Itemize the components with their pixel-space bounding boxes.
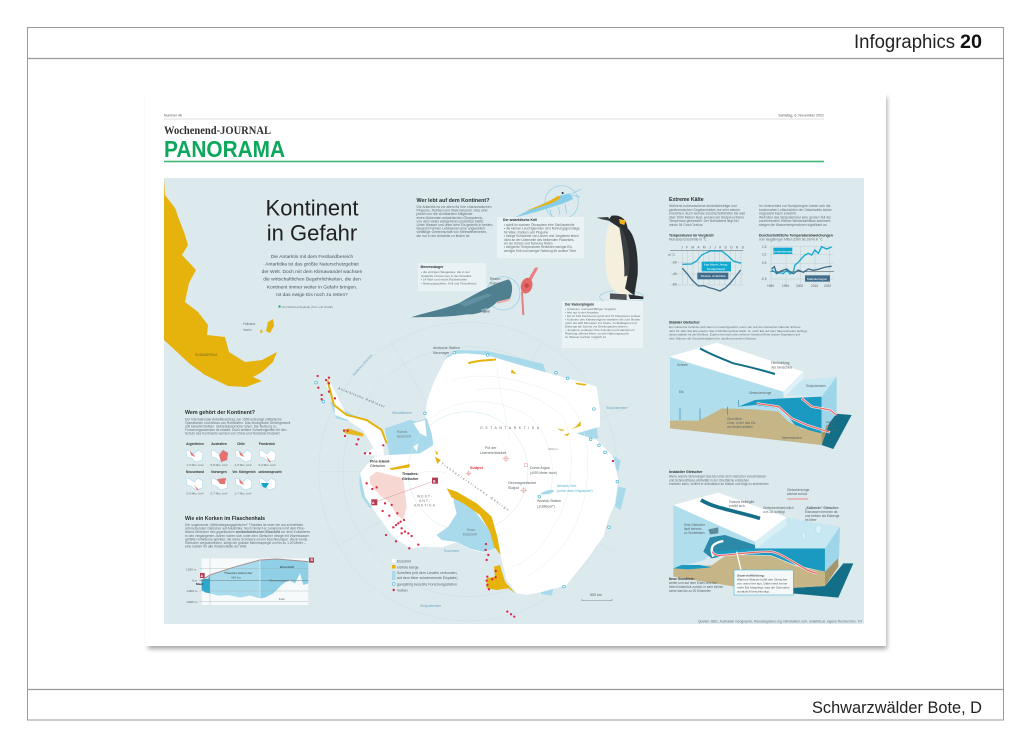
south america map: SÜDAMERIKA: [195, 353, 218, 357]
stable glacier diagram: am Boden aufsitzt: [727, 425, 753, 429]
antarctic peninsula: [326, 383, 387, 456]
section: who owns the continent: Norwegen: [211, 470, 227, 474]
section: who owns the continent: Argentinien: [186, 442, 204, 446]
map labels: Südpolarmeer: [420, 604, 442, 608]
krill box: • spielt im marinen Ökosystem eine Schlüsselrolle: [504, 223, 575, 227]
chart: thwaites glacier cross section: Thwaites-Gletscher: [224, 571, 253, 575]
section: who owns the continent: Forschungszwecken ist erlaubt. Doch weitere Schwierigkeiten für den: [185, 428, 287, 432]
unstable glacier diagram: Sauerstoffbildung:: [737, 574, 764, 578]
stable glacier diagram: Grundlinie:: [727, 417, 743, 421]
unstable glacier diagram: fixiert hinterrück zurück, in sehr kleiner: [669, 585, 724, 589]
section: who owns the continent: Wem gehört der Kontinent?: [185, 410, 255, 416]
stable glacier diagram: Zone, in der das Eis: [727, 421, 756, 425]
header label: 20: [960, 32, 982, 53]
chart: thwaites glacier cross section: -2000 m: [186, 600, 198, 604]
penguin box: • Kolonien des Kaiserpinguins wandern bis zum Brüten: [565, 318, 640, 322]
map legend: eisfreie Berge: [397, 566, 419, 570]
ross ice shelf: [437, 497, 495, 552]
section: cork in a bottleneck: Island-Gletscher den gigantischen westantarktischen Eisschild vor dem Kollabieren.: [185, 530, 311, 534]
stable glacier diagram: Tiefen-: [826, 424, 835, 428]
whale and squid labels: Riesen-: [490, 277, 501, 281]
map labels: Neumayer: [433, 351, 450, 355]
penguin box: mehr als 200 Kilometer zur Küste, zu Eisklippen und: [565, 321, 637, 325]
penguin box: Eisbergs als Schutz vor Seeleoparden dienen: [565, 324, 628, 328]
section: extreme cold: minus 94 Grad Celsius.: [669, 223, 703, 227]
chart: temperature anomalies: 0,5: [762, 261, 767, 265]
chart: temperature comparison: Kap Morris Jesup,: [704, 262, 728, 266]
whale box: • 14 Wal- und sechs Robbenarten: [421, 278, 467, 282]
unstable glacier diagram: Neue Grundlinie:: [669, 577, 695, 581]
intro text: die wirtschaftlichen Begehrlichkeiten, die den: [263, 276, 361, 282]
unstable glacier diagram: von unten her aus. Dabei wird immer: [737, 582, 788, 586]
intro text: [262, 254, 363, 298]
unstable glacier diagram: [669, 488, 853, 598]
section: cork in a bottleneck: Der sogenannte „Weltuntergangsgletscher" Thwaites ist einer der am schnellsten: [185, 523, 303, 527]
ice shelves: [330, 350, 626, 596]
chart: temperature comparison: -60: [672, 282, 677, 286]
header label: Infographics: [854, 32, 955, 53]
emperor penguin: [597, 215, 644, 304]
chart: thwaites glacier cross section: -1000 m: [186, 589, 198, 593]
masthead: Wochenend-JOURNAL: [164, 125, 271, 137]
map labels: 500 km: [590, 593, 602, 597]
map labels: (unter dem Eispanzer): [557, 489, 593, 493]
chart: thwaites glacier cross section: 460 km: [231, 576, 242, 580]
map labels: Wostok-Station: [537, 499, 561, 503]
mini maps: territorial claims: [186, 450, 276, 490]
title: Kontinent: [266, 196, 358, 220]
map labels: Unerreichbarkeit: [480, 451, 506, 455]
west antarctic thwaites zone: [370, 472, 407, 520]
unstable glacier diagram: „Kalbende" Gletscher:: [805, 506, 839, 510]
section: extreme cold: erreichten. Auch weil die Durchschnittshöhe bei weit: [669, 212, 745, 216]
antarctica map: [315, 322, 630, 621]
map labels: („Kältepol"): [537, 504, 555, 508]
masthead: Nummer 46: [164, 114, 182, 118]
section: cork in a bottleneck: [185, 516, 311, 549]
intro text: Kontinent immer weiter in Gefahr bringen.: [267, 284, 357, 290]
intro text: der Welt. Doch mit dem Klimawandel wachsen: [262, 269, 363, 275]
penguin box: [562, 301, 643, 348]
chart: thwaites glacier cross section: [186, 558, 314, 605]
pole markers: [466, 455, 527, 494]
section: who owns the continent: Frankreich: [259, 442, 275, 446]
section: extreme cold: Im Unterschied zur Nordpolregion haben sich die: [759, 204, 831, 208]
krill box: [497, 217, 584, 258]
whale box: • Nahrungsquellen: Krill und Tintenfische: [421, 281, 477, 285]
section: extreme cold: zunehmenden Wärme Westantarktikas aufnimmt,: [759, 219, 831, 223]
section: who owns the continent: 1,2 Mio. km²: [234, 463, 252, 467]
map labels: OSTANTARKTIKA: [480, 426, 542, 430]
masthead: [164, 114, 824, 162]
stable glacier diagram: warme: [826, 420, 835, 424]
infographic panel background: [164, 178, 864, 624]
weddell white islands: [413, 420, 427, 452]
chart: temperature comparison: Wostok, Antarktika: [701, 274, 726, 278]
stable glacier text: desto stabiler ist der Eisfluss. Zudem bremsen die mehrere Hundert Meter dicken Eisplatten auf: [669, 333, 800, 337]
chart: temperature comparison: -20: [672, 260, 677, 264]
unstable glacier text: ersetzen kann, verliert er dramatisch an Masse und trägt zu zerbrechen.: [669, 482, 769, 486]
section: who lives on the continent: Unter Wasser und unter dem Eis gedeiht in beiden,: [416, 223, 493, 227]
map labels: Ross-: [467, 528, 476, 532]
map labels: [338, 346, 628, 608]
title: in Gefahr: [267, 220, 357, 246]
section: who lives on the continent: von dem vieles weitgehend unsichtbar bleibt.: [416, 219, 484, 223]
section: who owns the continent: 6,9 Mio. km²: [210, 463, 228, 467]
map labels: ANT-: [419, 499, 431, 503]
stable glacier diagram: Meeresboden: [782, 436, 802, 440]
chart: temperature anomalies: 2010: [811, 284, 818, 288]
chart: temperature comparison: -40: [672, 272, 677, 276]
section: who owns the continent: Schutz des Kontinents werden von China und Russland blockiert.: [185, 432, 281, 436]
stable glacier diagram: Eis: [679, 390, 684, 394]
krill box: für Wale, Robben und Pinguine: [504, 230, 548, 234]
unstable glacier diagram: mehr Eis freigelegt, was die Schmelze: [737, 586, 790, 590]
map labels: Transantarktisches Gebirge: [440, 462, 511, 513]
section: who owns the continent: 2,7 Mio. km²: [210, 492, 228, 496]
map legend: Vulkan: [397, 588, 408, 592]
map labels: deutsche Station: [433, 346, 460, 350]
whale box: [418, 263, 486, 291]
chart: thwaites glacier cross section: B: [310, 558, 314, 562]
krill illustration: [515, 186, 582, 219]
map legend: [392, 559, 458, 592]
map labels: Ronne-: [397, 430, 408, 434]
unstable glacier text: Wenn warme Strömungen das Eis unter dem Gletscher verschmelzen: [669, 474, 766, 478]
section: who lives on the continent: die nur in der Antarktis zu finden ist.: [416, 234, 470, 238]
section: who lives on the continent: tausend Formen Lebewesen eine unglaublich: [416, 227, 485, 231]
section: extreme cold: Weit über das Südpolarmeer eine großen Teil der: [759, 215, 832, 219]
unstable glacier diagram: Warmes Wasser höhlt den Gletscher: [737, 578, 787, 582]
chart: thwaites glacier cross section: Fels: [279, 597, 285, 601]
stable glacier diagram: des Gletschers: [771, 366, 793, 370]
unstable glacier diagram: Gletschereisbrüchlich: [763, 506, 794, 510]
section: extreme cold: geothermischen Gegebenheiten nur sehr extrem: [669, 208, 740, 212]
title: [266, 196, 358, 246]
section: extreme cold: steigen die Wassertemperaturen signifikant an.: [759, 223, 828, 227]
section: who owns the continent: Ver. Königreich: [232, 470, 256, 474]
unstable glacier diagram: läuft beheim: [684, 527, 702, 531]
unstable glacier text: und Schmelzflüsse (Aktivität) in der Oberfläche entstehen: [669, 478, 749, 482]
map labels: Südpol: [470, 466, 483, 470]
map labels: Thwaites-: [402, 472, 419, 476]
whale box: Antarktis vorkommen in der Antarktis: [421, 274, 472, 278]
section: cork in a bottleneck: gefüllte Hohlräume gebildet, die diese Schmelze enorm beschleunigen. Wenn beide: [185, 537, 308, 541]
section: extreme cold: über 2000 Metern liegt, wurden am Südpol extreme: [669, 215, 744, 219]
contour lines: [390, 367, 588, 577]
section: who lives on the continent: eines blühenden antarktischen Ökosystems,: [416, 216, 483, 220]
stable glacier diagram: Fließrichtung: [771, 361, 790, 365]
map labels: Südliches Eismeer: [352, 352, 374, 377]
intro text: Ist das ewige Eis noch zu retten?: [276, 292, 348, 298]
penguin box: Richtung offenes Meer, wo die Nahrungssuche: [565, 332, 629, 336]
chart: temperature comparison: Monatsdurchschnitte in °C: [669, 238, 707, 242]
krill box: weniger Krill und weniger Nahrung für andere Tiere: [504, 249, 576, 253]
map labels: Weddellmeer: [392, 411, 413, 415]
chart: thwaites glacier cross section: Meer: [196, 582, 204, 586]
chart: temperature anomalies: 1980: [767, 284, 774, 288]
section: who lives on the continent: Die Antarktis ist vor allem für ihre charismatischen: [416, 205, 492, 209]
newspaper page: [145, 93, 886, 646]
map labels: Pol der: [485, 446, 497, 450]
section: who owns the continent: 1,3 Mio. km²: [186, 463, 204, 467]
unstable glacier diagram: wächst zurück: [787, 492, 808, 496]
penguin box: • Jungtiere verlassen ihre Kolonien und wandern in: [565, 328, 635, 332]
lake vostok: [540, 490, 554, 494]
A-B section line: [374, 481, 435, 502]
penguin box: • scheinen- und auchfähiger Vogelart: [565, 307, 616, 311]
chart: temperature comparison: [668, 234, 747, 291]
chart: temperature anomalies: [759, 234, 834, 288]
section: who owns the continent: Der Internationale Antarktisvertrag von 1959 untersagt militärische: [185, 418, 282, 422]
masthead: Samstag, 6. November 2021: [778, 114, 824, 118]
chart: temperature anomalies: -0,5: [761, 277, 767, 281]
section: who owns the continent: 0,5 Mio. km²: [186, 492, 204, 496]
stable glacier text: Jahr für Jahr das Eis ersetzt, das in Richtung Meer fließt. Je mehr Eis auf dem Meeresboden aufliegt,: [669, 329, 808, 333]
chart: temperature anomalies: 1,0: [762, 252, 767, 256]
stable glacier text: Stabiler Gletscher: [669, 320, 700, 324]
volcanoes: [316, 375, 614, 618]
map labels: Dome Argus: [530, 466, 550, 470]
unstable glacier diagram: zu Schelfeisen: [684, 531, 705, 535]
map labels: Südpolarmeer: [606, 406, 628, 410]
map labels: Gletscher: [370, 464, 386, 468]
stable glacier diagram: [670, 343, 852, 449]
section: who lives on the continent: vielfältige Gemeinschaft von Kleinstlebewesen,: [416, 230, 487, 234]
map labels: Südpol: [508, 486, 519, 490]
footer label: Schwarzwälder Bote, D: [812, 698, 982, 717]
byline: Von Manfred Zapletal (Text und Grafik): [282, 305, 333, 309]
sperm whale and squid: [411, 268, 538, 317]
south america map: [164, 178, 277, 387]
chart: thwaites glacier cross section: 1200 m: [186, 568, 197, 572]
stable glacier diagram: strömung: [826, 428, 839, 432]
section: who owns the continent: Operationen und Abbau von Rohstoffen. Das ökologische Gleichgewicht: [185, 421, 290, 425]
section: cork in a bottleneck: eine Gefahr für alle Küstenstädte der Welt.: [185, 545, 247, 549]
section: extreme cold: insgesamt kaum erwärmt.: [759, 212, 797, 216]
stable glacier diagram: Schnee: [677, 363, 688, 367]
map labels: (4093 Meter hoch): [530, 471, 557, 475]
chart: temperature anomalies: 1990: [782, 284, 789, 288]
chart: thwaites glacier cross section: 0 m: [192, 578, 198, 582]
stable glacier text: [669, 320, 808, 340]
stable glacier diagram: Gletscherzunge: [749, 391, 772, 395]
map labels: Wostok-See: [557, 484, 577, 488]
map legend: Schelfeis (mit dem Landeis verbunden,: [397, 571, 458, 575]
chart: temperature anomalies: 2020: [824, 284, 831, 288]
unstable glacier text: [669, 470, 769, 486]
map legend: Eisschild: [397, 560, 411, 564]
whale and squid labels: Kalmar: [490, 282, 501, 286]
section: who owns the continent: unbeansprucht: [258, 470, 282, 474]
masthead: PANORAMA: [164, 136, 285, 162]
south america map: Falkland-: [243, 322, 256, 326]
krill box: dicht an der Unterseite des treibenden Packeises,: [504, 238, 574, 242]
sources: Quellen: BBC, Australian Geographic, Reuseleglobus.org, klimafakten.com, antarktis.at, eigene Recherchen, 7/4: [698, 620, 862, 624]
research stations: [315, 351, 619, 588]
unstable glacier diagram: Eine Gletscher: [684, 523, 706, 527]
unstable glacier diagram: Eismassen brechen ab: [805, 510, 838, 514]
stable glacier diagram: Südpolarmeer: [806, 384, 827, 388]
map labels: 4000 m: [548, 447, 559, 451]
mountain ranges: [343, 369, 587, 593]
map legend: ganzjährig besetzte Forschungsstation: [397, 582, 457, 586]
unstable glacier diagram: und treiben als Eisberge: [805, 514, 840, 518]
chart: temperature comparison: Temperaturen im Vergleich: [669, 234, 714, 238]
unstable glacier diagram: Packeis treibt/gibt: [729, 500, 754, 504]
krill box: • steigende Temperaturen bedeuten weniger Eis,: [504, 245, 573, 249]
antarctic ice sheet: [360, 353, 618, 595]
unstable glacier diagram: seine das bis zu 20 Kilometer.: [669, 589, 712, 593]
section: who owns the continent: Neuseeland: [186, 470, 204, 474]
penguin box: • bis zu 130 Zentimeter groß und 37 Kilogramm schwer: [565, 314, 641, 318]
antarctica map: A: [372, 501, 375, 505]
krill box: • riesige Schwärme von Larven und Jungtieren leben: [504, 234, 579, 238]
krill box: Der antarktische Krill: [503, 218, 537, 222]
penguin box: im Wasser leichter möglich ist: [565, 335, 606, 339]
map labels: WEST-: [417, 494, 433, 498]
section: cork in a bottleneck: schmelzenden Gletscher auf Antarktika. Noch hindert er zusammen mit dem Pine-: [185, 527, 305, 531]
unstable glacier diagram: im Meer: [805, 518, 817, 522]
section: extreme cold: Während unbewaschene Antarktisbeträge und: [669, 204, 737, 208]
unstable glacier diagram: erhöht sich: [729, 504, 745, 508]
chart: temperature anomalies: vom langjährigen Mittel (1990 bis 2004) in °C: [759, 238, 823, 242]
chart: temperature anomalies: Südpolarregion: [807, 277, 828, 281]
unstable glacier diagram: weiter und auf dem Eises brechen: [669, 581, 717, 585]
chart: temperature anomalies: Durchschnittliche Temperaturabweichungen: [759, 234, 833, 238]
map graticule: [319, 322, 630, 621]
chart: temperature comparison: Nordgrönland: [707, 267, 725, 271]
section: who owns the continent: 0,4 Mio. km²: [258, 463, 276, 467]
whale and squid labels: Pottwal: [480, 310, 490, 314]
chart: temperature comparison: JFMAMJJASOND: [681, 246, 747, 250]
section: who lives on the continent: jedoch nur die sichtbarsten Mitglieder: [416, 212, 474, 216]
section: extreme cold: Temperatur gemessen. Der Nahrabend liegt bei: [669, 219, 739, 223]
page shadow: [148, 97, 887, 649]
section: extreme cold: [669, 197, 833, 227]
map labels: Eisschelf: [397, 434, 411, 438]
map labels: ARKTIKA: [414, 504, 436, 508]
chart: temperature anomalies: Nordpolarregion: [772, 249, 794, 253]
section: who owns the continent: 1,7 Mio. km²: [234, 492, 252, 496]
south america map: Inseln: [243, 328, 252, 332]
section: who owns the continent: Chile: [237, 442, 245, 446]
unstable glacier diagram: u.m.1/1 schlägt: [763, 510, 785, 514]
section: who owns the continent: soll bewahrt bleiben. Gebietsansprüche ruhen. Die Nutzung zu: [185, 424, 277, 428]
scale bar: [582, 599, 612, 600]
krill box: • die kleinen Leuchtgarnelen sind Nahrungsgrundlage: [504, 227, 580, 231]
intro text: Antarktika ist das größte Naturschutzgebiet: [265, 262, 359, 268]
unstable glacier text: Instabiler Gletscher: [669, 470, 703, 474]
section: extreme cold: bodennahen Luftschichten der Ostantarktis bisher: [759, 208, 833, 212]
map labels: Rossmeer: [444, 549, 460, 553]
penguin box: • lebt nur in der Antarktis: [565, 310, 599, 314]
map labels: Eisschelf: [463, 532, 477, 536]
whale box: Meeressäuger: [420, 265, 444, 269]
map labels: Gletscher: [402, 477, 419, 481]
whale box: • die einzigen Säugetiere, die in der: [421, 270, 470, 274]
chart: temperature anomalies: 2000: [796, 284, 803, 288]
map labels: Geomagnetischer: [508, 481, 537, 485]
antarctica map: B: [433, 480, 436, 484]
map labels: Antarktische Halbinsel: [338, 386, 386, 409]
map labels: Pine-Island-: [370, 460, 391, 464]
krill box: wo sie Schutz und Nahrung finden: [504, 242, 553, 246]
section: cork in a bottleneck: Gletscher wegschmelzen, steigt der globale Meeresspiegel um bis zu 1,20 Meter –: [185, 541, 306, 545]
penguin box: Der Kaiserpinguin: [565, 302, 594, 306]
section: who owns the continent: [185, 410, 290, 496]
polar circle: [408, 412, 528, 532]
section: who lives on the continent: Wer lebt auf dem Kontinent?: [416, 198, 490, 204]
chart: thwaites glacier cross section: A: [200, 574, 204, 578]
unstable glacier diagram: Gletscherzunge: [787, 488, 810, 492]
chart: thwaites glacier cross section: Meeresspiegel: [269, 578, 289, 582]
stable glacier text: dem Wasser die Geschwindigkeit der nachkommenden Massen.: [669, 336, 757, 340]
stable glacier text: Ein Gletscher befindet sich dann im Gleichgewicht, wenn der auf den Gletscher fallende Schnee: [669, 325, 801, 329]
section: who lives on the continent: Pinguine, Robben und Wale bekannt. Dies sind: [416, 209, 488, 213]
chart: thwaites glacier cross section: Eisschild: [280, 565, 294, 569]
whale and squid labels: [480, 277, 501, 314]
section: extreme cold: Extreme Kälte: [669, 197, 704, 203]
chart: temperature anomalies: 1,5: [762, 245, 767, 249]
section: cork in a bottleneck: In den vergangenen Jahren haben sich unter dem Gletscher riesige mit Warmwasser: [185, 534, 310, 538]
map legend: auf dem Meer schwimmende Eisplatte): [397, 576, 458, 580]
section: cork in a bottleneck: Wie ein Korken im Flaschenhals: [185, 516, 265, 522]
intro text: Die Antarktis mit dem Festlandbereich: [271, 254, 353, 260]
section: who lives on the continent: [416, 198, 493, 238]
unstable glacier diagram: zusätzlich beschleunigt.: [737, 590, 770, 594]
section: who owns the continent: Australien: [211, 442, 227, 446]
chart: temperature comparison: in °C: [668, 253, 676, 257]
